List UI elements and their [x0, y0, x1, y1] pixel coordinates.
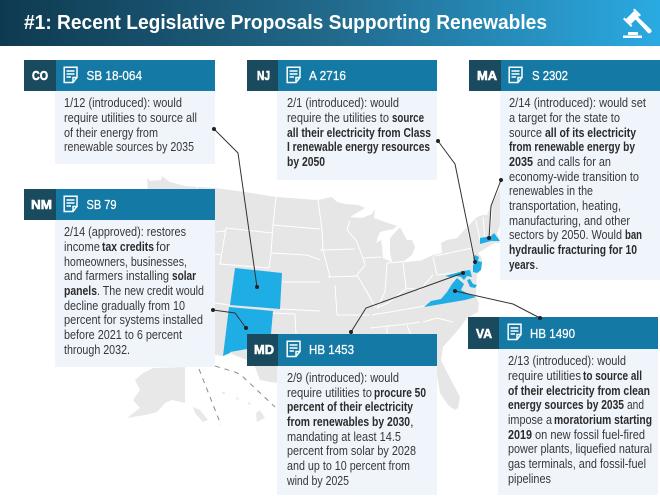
panel: Virginia HB 1490: impose a	[508, 412, 553, 427]
leader line: New Mexico	[211, 308, 248, 330]
panel: Virginia HB 1490: HB 1490	[530, 326, 575, 341]
panel: Massachusetts S 2302: renewables in the	[509, 183, 593, 198]
panel: New Jersey A 2716: all their electricity from Class	[287, 125, 431, 140]
panel: Virginia HB 1490: pipelines	[508, 471, 551, 486]
panel: Colorado SB 18-064: of their energy from	[64, 125, 158, 140]
panel: Maryland HB 1453: require utilities to	[287, 385, 372, 400]
panel: Maryland HB 1453: procure 50	[374, 385, 426, 400]
highlighted state: Colorado	[230, 268, 282, 309]
header banner	[0, 0, 660, 46]
panel: New Mexico SB 79: tax credits	[102, 239, 154, 254]
panel: New Mexico SB 79: NM	[31, 197, 52, 212]
highlighted state: New Mexico	[223, 307, 273, 356]
panel: Massachusetts S 2302	[469, 60, 660, 280]
panel: Virginia HB 1490	[468, 317, 658, 495]
highlighted state: Maryland	[445, 270, 477, 288]
panel: Massachusetts S 2302: transportation, heating,	[509, 198, 621, 213]
panel: Maryland HB 1453: and up to 10 percent from	[287, 458, 410, 473]
panel: Colorado SB 18-064: CO	[32, 68, 48, 83]
panel: New Jersey A 2716: 2/1 (introduced): would	[287, 95, 399, 110]
icon: document	[509, 67, 522, 82]
panel: New Mexico SB 79: through 2032.	[64, 342, 130, 357]
panel: Massachusetts S 2302: and calls for an	[537, 154, 611, 169]
panel: Massachusetts S 2302: years	[509, 257, 535, 272]
panel: New Jersey A 2716: source	[392, 110, 424, 125]
panel: Maryland HB 1453: from renewables by 2030	[287, 414, 410, 429]
panel: New Mexico SB 79: for	[156, 239, 171, 254]
panel: Maryland HB 1453: MD	[254, 342, 274, 357]
panel: New Mexico SB 79: decline gradually from 10	[64, 298, 185, 313]
panel: Massachusetts S 2302: source	[509, 125, 542, 140]
Alaska and Hawaii inset	[127, 366, 275, 425]
highlighted state: Virginia	[424, 278, 476, 307]
leader line: Virginia	[453, 289, 542, 320]
panel: Maryland HB 1453: wind by 2025	[286, 473, 349, 488]
panel: Massachusetts S 2302: MA	[477, 68, 498, 83]
panel: New Mexico SB 79: income	[64, 239, 100, 254]
panel: New Mexico SB 79: and farmers installing	[64, 268, 169, 283]
panel: Virginia HB 1490: energy sources by 2035	[508, 397, 624, 412]
panel: Colorado SB 18-064	[24, 60, 215, 164]
panel: New Jersey A 2716: require the utilities to	[287, 110, 389, 125]
title: #1: Recent Legislative Proposals Supporting Renewables	[24, 11, 547, 34]
panel: Massachusetts S 2302: S 2302	[532, 68, 568, 83]
leader line: New Jersey	[436, 139, 477, 264]
panel: New Jersey A 2716: I renewable energy resources	[287, 139, 430, 154]
panel: Massachusetts S 2302: economy-wide transition to	[509, 169, 639, 184]
panel: New Mexico SB 79: homeowners, businesses,	[64, 254, 187, 269]
panel: Massachusetts S 2302: all of its electricity	[545, 125, 637, 140]
panel: New Jersey A 2716: A 2716	[309, 68, 346, 83]
panel: Massachusetts S 2302: manufacturing, and other	[509, 213, 631, 228]
panel: New Jersey A 2716	[247, 60, 437, 180]
panel: New Mexico SB 79: solar	[172, 268, 196, 283]
panel: Virginia HB 1490: and	[627, 397, 644, 412]
leader line: Massachusetts	[487, 178, 503, 240]
panel: Maryland HB 1453: percent of their electricity	[287, 399, 414, 414]
panel: New Mexico SB 79: panels	[64, 283, 97, 298]
highlighted state: Massachusetts	[480, 233, 500, 244]
panel: Maryland HB 1453: mandating at least 14.5	[287, 429, 401, 444]
leader line: Maryland	[349, 271, 465, 334]
panel: New Mexico SB 79: 2/14 (approved): restores	[64, 224, 186, 239]
panel: New Mexico SB 79: before 2021 to 6 percent	[64, 327, 182, 342]
icon: document	[287, 341, 300, 356]
panel: Maryland HB 1453: HB 1453	[309, 342, 354, 357]
panel: Colorado SB 18-064: renewable sources by 2035	[64, 139, 194, 154]
leader line: Colorado	[212, 127, 259, 289]
icon: document	[64, 196, 77, 212]
highlighted state: New Jersey	[473, 255, 482, 273]
panel: New Jersey A 2716: NJ	[257, 68, 270, 83]
panel: Virginia HB 1490: 2019	[508, 427, 532, 442]
state borders	[196, 186, 492, 350]
icon: document	[287, 67, 300, 82]
panel: Massachusetts S 2302: a target for the state to	[509, 110, 620, 125]
panel: Maryland HB 1453: 2/9 (introduced): would	[287, 370, 399, 385]
panel: Massachusetts S 2302: ban	[625, 227, 642, 242]
panel: Massachusetts S 2302: 2035	[509, 154, 533, 169]
panel: Massachusetts S 2302: sectors by 2050. Would	[509, 227, 622, 242]
panel: Virginia HB 1490: 2/13 (introduced): would	[508, 353, 626, 368]
panel: Virginia HB 1490: VA	[476, 326, 493, 341]
panel: New Mexico SB 79: . The new credit would	[97, 283, 204, 298]
icon: gavel	[623, 8, 652, 38]
panel: Colorado SB 18-064: require utilities to source all	[64, 110, 197, 125]
panel: New Mexico SB 79: SB 79	[86, 197, 116, 212]
panel: Maryland HB 1453: percent from solar by 2028	[287, 443, 416, 458]
panel: Colorado SB 18-064: SB 18-064	[86, 68, 142, 83]
icon: document	[508, 324, 521, 340]
panel: Virginia HB 1490: to source all	[583, 368, 642, 383]
map of the United States	[147, 176, 505, 490]
panel: New Jersey A 2716: by 2050	[287, 154, 325, 169]
panel: Maryland HB 1453	[247, 334, 437, 495]
icon: document	[64, 67, 77, 82]
panel: Massachusetts S 2302: .	[535, 257, 539, 272]
panel: Virginia HB 1490: require utilities	[508, 368, 581, 383]
panel: Maryland HB 1453: ,	[410, 414, 414, 429]
panel: Colorado SB 18-064: 1/12 (introduced): would	[64, 95, 182, 110]
panel: New Mexico SB 79: percent for systems installed	[64, 312, 203, 327]
panel: New Mexico SB 79	[24, 189, 215, 367]
